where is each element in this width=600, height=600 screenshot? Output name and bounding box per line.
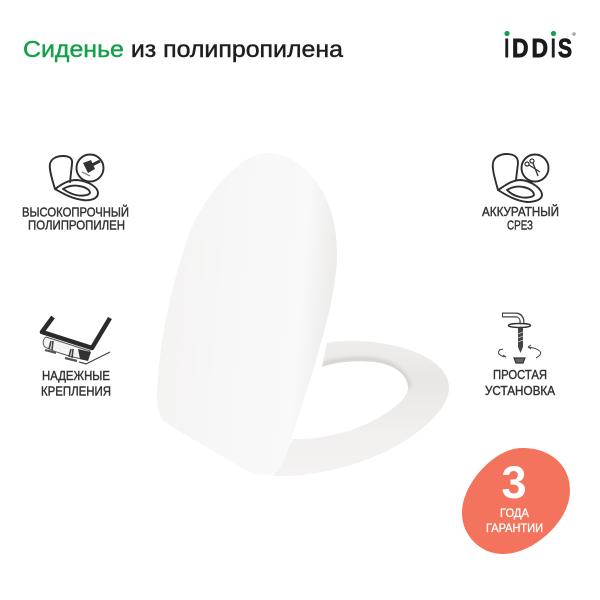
feature: reliable fixings	[41, 317, 111, 398]
logo: iDDIS: D	[512, 33, 528, 63]
label: НАДЕЖНЫЕ	[42, 369, 110, 383]
seat ring	[273, 341, 449, 476]
number 3: 3	[501, 457, 527, 508]
label: АККУРАТНЫЙ	[482, 204, 559, 219]
feature: high-strength polypropylene	[22, 154, 129, 232]
feature: easy installation	[485, 315, 556, 398]
title: Сиденье из полипропилена	[23, 36, 343, 62]
logo: iDDIS: D	[532, 33, 548, 63]
feature: neat cut	[482, 154, 559, 232]
seat lid	[157, 153, 337, 475]
badge text: ГОДА	[500, 508, 529, 520]
label: ПРОСТАЯ	[493, 368, 547, 382]
feature: high-strength polypropylene: ПОЛИПРОПИЛЕН	[28, 218, 125, 232]
logo: iDDIS	[504, 31, 576, 63]
logo: iDDIS: I	[504, 33, 509, 63]
icon: seat with scissors	[493, 154, 548, 202]
icon: seat with hammer	[50, 154, 104, 200]
logo: iDDIS: I	[551, 33, 556, 63]
coral blob	[462, 448, 570, 554]
toilet seat product	[157, 153, 449, 476]
feature: neat cut: СРЕЗ	[507, 218, 533, 232]
warranty badge: ГАРАНТИИ	[486, 523, 543, 535]
feature: easy installation: УСТАНОВКА	[485, 384, 556, 398]
logo: iDDIS: S	[558, 33, 572, 63]
icon: hinge bracket	[42, 317, 110, 364]
warranty badge	[462, 448, 570, 554]
icon: screw and nut	[498, 315, 541, 363]
ring inner shadow	[322, 359, 409, 388]
label: ВЫСОКОПРОЧНЫЙ	[22, 204, 129, 220]
feature: reliable fixings: КРЕПЛЕНИЯ	[41, 384, 111, 398]
